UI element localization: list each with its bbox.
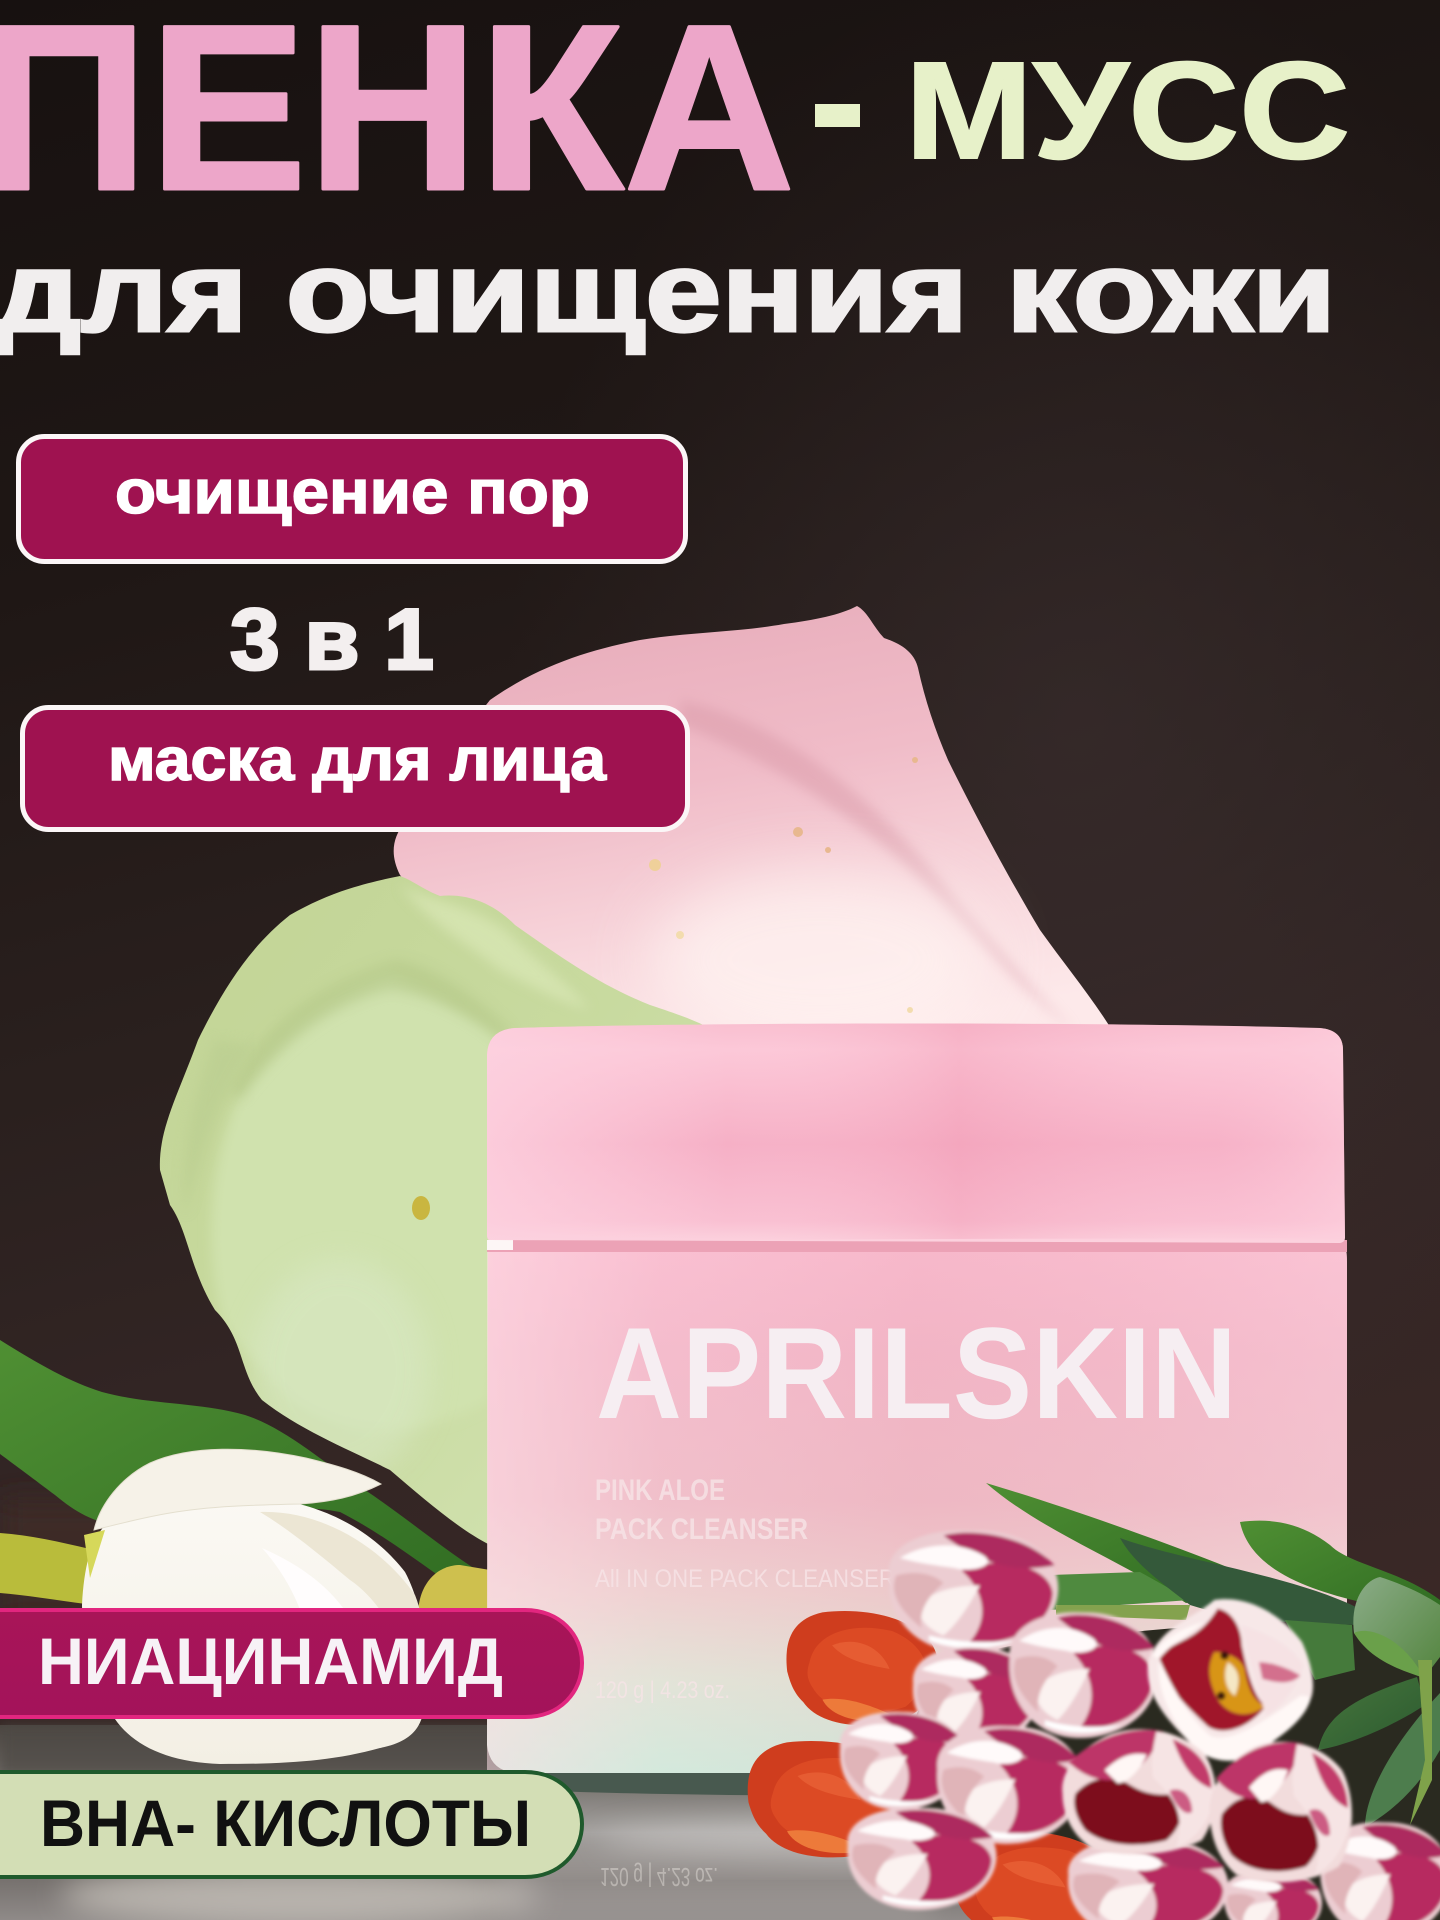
pill: ниацинамид: НИАЦИНАМИД — [38, 1624, 503, 1698]
bouquet leaves — [986, 1483, 1440, 1827]
pink white tulips — [840, 1530, 1440, 1920]
tulip lower petals — [82, 1498, 426, 1764]
open tulips — [1062, 1599, 1352, 1882]
product label: PINK ALOE — [595, 1474, 725, 1507]
jar lid — [487, 1024, 1345, 1243]
product label: All IN ONE PACK CLEANSER — [595, 1565, 895, 1593]
jar neck gap — [487, 1240, 1347, 1252]
bouquet dark backing — [880, 1610, 1440, 1920]
green cream inner bowl — [210, 892, 578, 1469]
product label — [595, 1474, 895, 1704]
pill: ниацинамид — [0, 1610, 582, 1717]
pill: очищение пор: очищение пор — [115, 458, 590, 527]
pill: маска для лица: маска для лица — [108, 726, 607, 793]
pill: вна-кислоты — [0, 1772, 582, 1877]
pill: очищение пор — [18, 436, 686, 562]
product label: PACK CLEANSER — [595, 1513, 808, 1546]
green cream speckle — [412, 1196, 430, 1220]
reflection of jar text: 120 g | 4.23 oz. — [600, 1862, 718, 1892]
green cream swatch — [160, 876, 712, 1545]
subtitle: для очищения кожи — [0, 229, 1336, 356]
pink cream swatch — [394, 606, 1112, 1050]
yellow petal behind jar — [418, 1565, 490, 1612]
product label: 120 g | 4.23 oz. — [595, 1677, 730, 1704]
white tulip — [82, 1449, 426, 1764]
jar body — [487, 1250, 1347, 1773]
orange tulips — [748, 1611, 1120, 1920]
cream light centre — [650, 870, 990, 1050]
tulip top petal — [94, 1449, 381, 1530]
pill: вна-кислоты: ВНА- КИСЛОТЫ — [40, 1786, 531, 1860]
brand name: APRILSKIN — [596, 1300, 1237, 1446]
jar shadow base — [495, 1770, 1180, 1800]
tulip bouquet — [748, 1483, 1440, 1920]
tulip shaded fold — [260, 1512, 424, 1680]
table surface — [0, 1725, 1440, 1920]
jar — [487, 1024, 1347, 1773]
title: мусс: МУСС — [905, 34, 1350, 188]
large green leaf left — [0, 1340, 490, 1610]
label: 3 в 1: 3 в 1 — [230, 592, 434, 688]
yellow stem — [0, 1533, 90, 1604]
cream speckles — [649, 757, 918, 1013]
pill: маска для лица — [22, 708, 688, 830]
cream fold shadow — [680, 700, 1075, 1030]
